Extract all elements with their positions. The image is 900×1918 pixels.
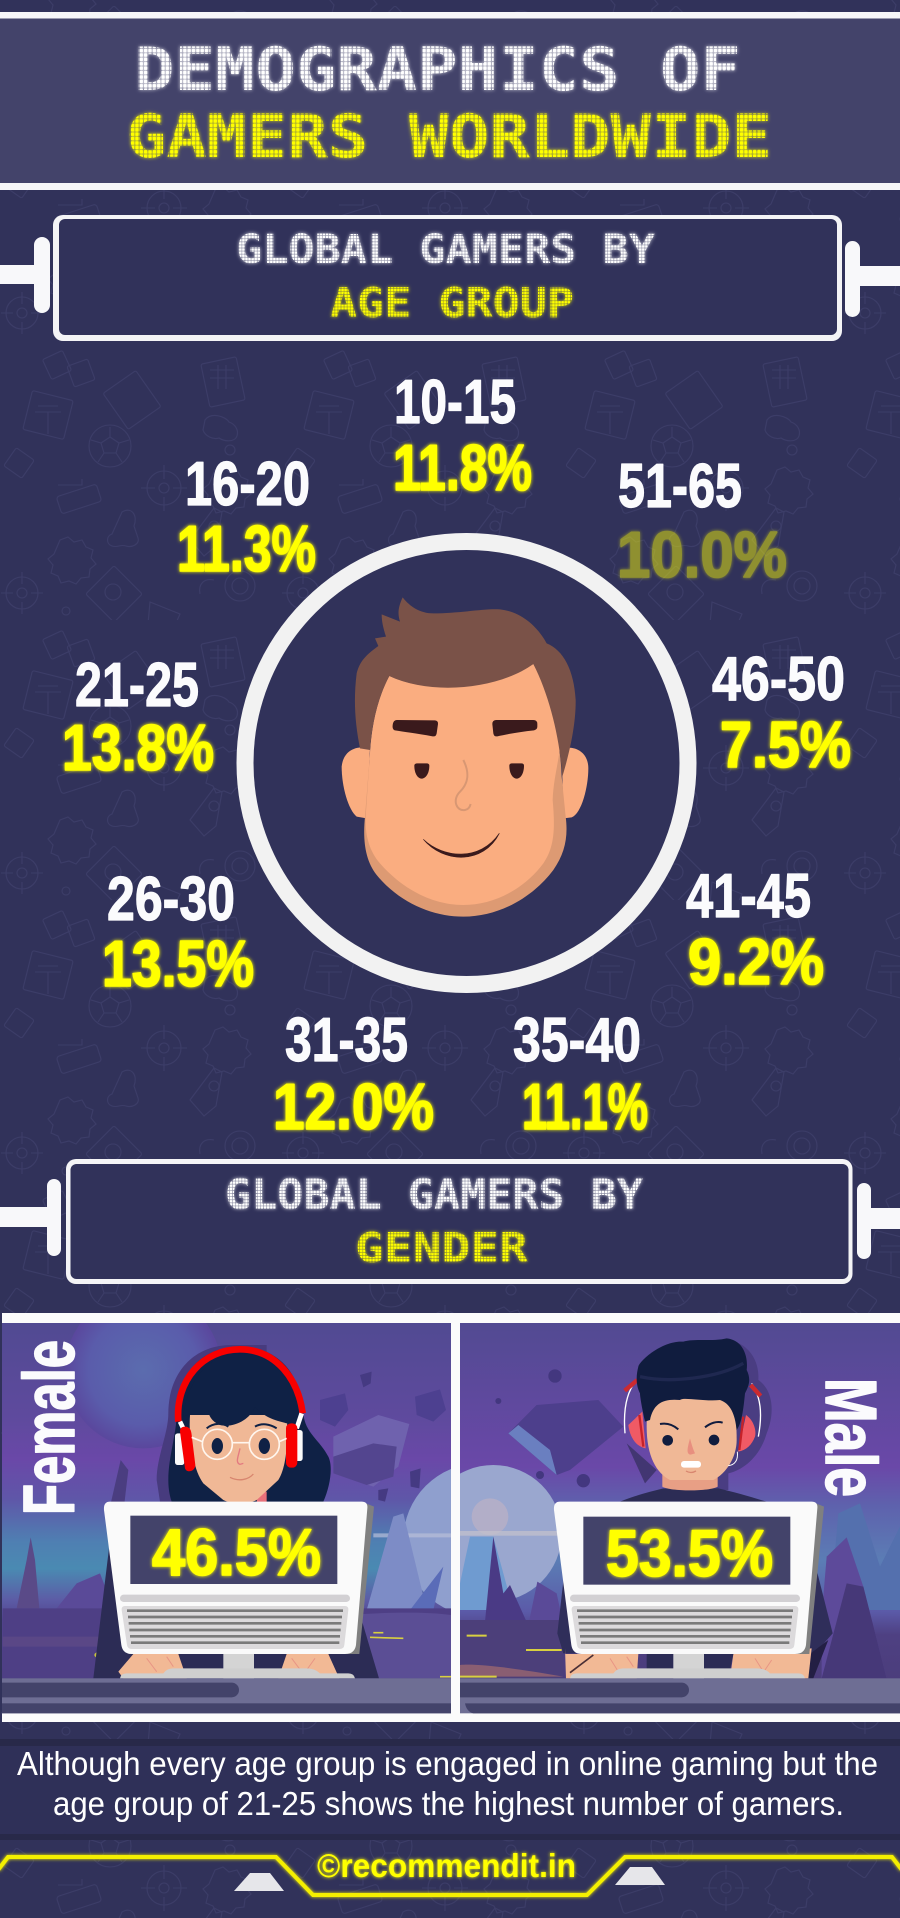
character: female gamer <box>2 1345 451 1713</box>
title banner <box>0 12 900 190</box>
screen <box>130 1516 337 1584</box>
age label: 16-20 <box>177 450 316 585</box>
age label: 10-15 <box>393 368 532 504</box>
panel: male <box>425 1323 900 1713</box>
icon: right trapezoid <box>615 1867 665 1885</box>
title line 1: DEMOGRAPHICS OF <box>134 35 741 105</box>
age label: 31-35 <box>273 1006 434 1143</box>
age label: 16-20: 16-20 <box>185 450 310 519</box>
age label: 35-40: 35-40 <box>513 1006 641 1075</box>
age label: 46-50: 46-50 <box>712 645 845 714</box>
scene: alien landscape left <box>2 1323 451 1678</box>
screen <box>583 1517 790 1585</box>
icon: smiling face <box>342 597 588 917</box>
footer frame <box>0 1847 900 1895</box>
divider between panels <box>451 1323 460 1713</box>
age label: 41-45: 9.2% <box>688 925 824 998</box>
age label: 41-45: 41-45 <box>686 862 811 931</box>
age label: 41-45 <box>686 862 824 998</box>
age label: 21-25: 13.8% <box>62 711 214 784</box>
heading line 1: GLOBAL GAMERS BY <box>236 227 655 273</box>
table <box>2 1678 451 1713</box>
age label: 26-30 <box>102 865 254 1000</box>
age label: 51-65: 51-65 <box>618 452 742 521</box>
age label: 51-65: 10.0% <box>617 518 787 591</box>
age label: 31-35: 31-35 <box>285 1006 408 1075</box>
heading: global gamers by gender <box>0 1159 900 1284</box>
text block: conclusion <box>0 1739 900 1840</box>
label: male value: 53.5% <box>606 1516 773 1590</box>
text block: conclusion: age group of 21-25 shows the highest number of gamers. <box>53 1785 844 1822</box>
age label: 10-15: 11.8% <box>393 431 532 504</box>
title line 2: GAMERS WORLDWIDE <box>126 102 772 172</box>
age label: 21-25: 21-25 <box>75 651 199 720</box>
icon: laptop <box>104 1502 374 1679</box>
age label: 46-50: 7.5% <box>720 708 851 781</box>
age label: 16-20: 11.3% <box>177 512 316 585</box>
panel: female <box>2 1323 451 1714</box>
heading line 2: AGE GROUP <box>330 279 574 327</box>
age label: 35-40: 11.1% <box>522 1070 648 1143</box>
heading line 1: GLOBAL GAMERS BY <box>225 1170 644 1219</box>
label: female value: 46.5% <box>152 1515 321 1589</box>
age group circle with face <box>245 542 688 984</box>
age label: 26-30: 13.5% <box>102 927 254 1000</box>
brand: ©recommendit.in <box>317 1847 576 1884</box>
label: male: Male <box>810 1378 890 1497</box>
age label: 10-15: 10-15 <box>394 368 516 437</box>
age label: 51-65 <box>617 452 787 591</box>
age label: 31-35: 12.0% <box>273 1070 434 1143</box>
table <box>460 1678 900 1713</box>
label: female: Female <box>10 1340 90 1515</box>
character: male gamer <box>460 1338 900 1713</box>
age label: 35-40 <box>513 1006 648 1143</box>
icon: left trapezoid <box>234 1873 284 1891</box>
text block: conclusion: Although every age group is engaged in online gaming but the <box>17 1745 878 1782</box>
age label: 46-50 <box>712 645 851 781</box>
age label: 26-30: 26-30 <box>107 865 235 934</box>
scene: alien landscape right <box>460 1323 900 1678</box>
heading line 2: GENDER <box>355 1224 528 1272</box>
age label: 21-25 <box>62 651 214 784</box>
panel: gender frame <box>2 1313 900 1722</box>
heading: global gamers by age group <box>0 215 900 341</box>
neon line <box>0 1857 900 1895</box>
icon: laptop <box>554 1502 824 1679</box>
